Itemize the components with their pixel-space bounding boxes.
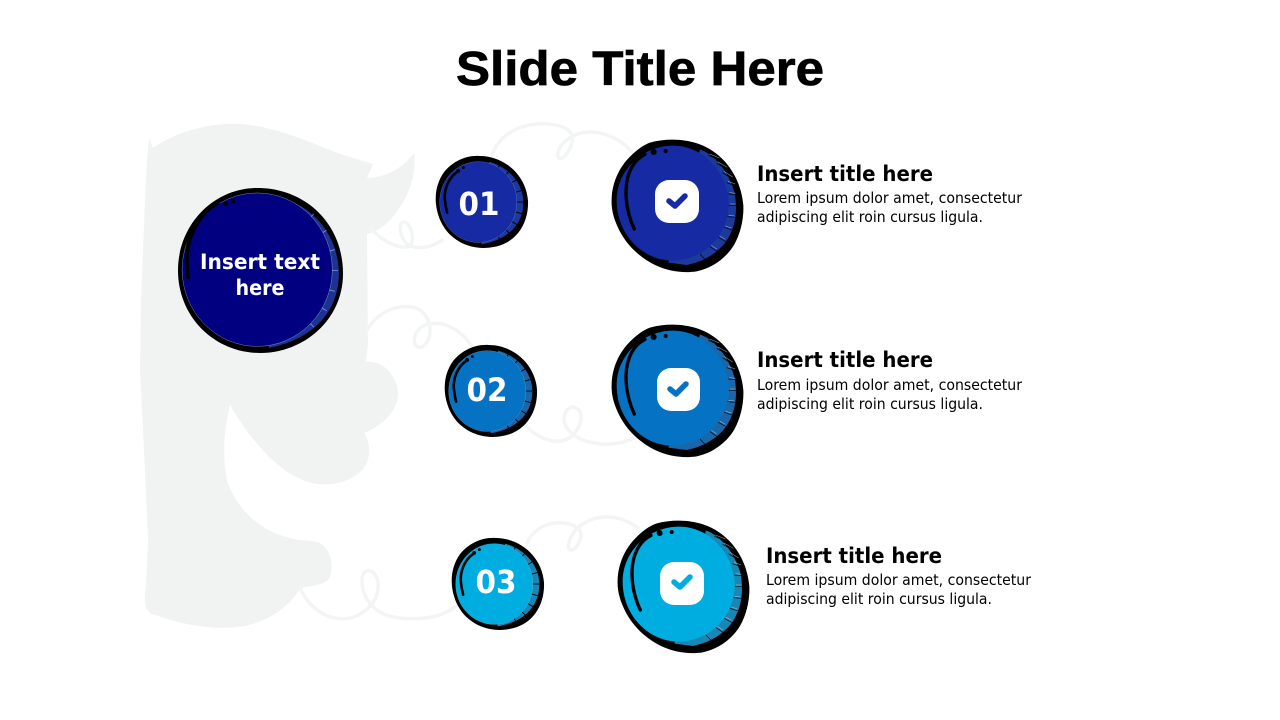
number coin 02	[445, 345, 537, 437]
connector squiggles	[300, 124, 640, 619]
number coin 01	[436, 156, 528, 248]
number coin 03	[452, 538, 544, 630]
text block 2: adipiscing elit roin cursus ligula.	[757, 395, 983, 413]
text block 1: adipiscing elit roin cursus ligula.	[757, 208, 983, 226]
text block 3	[766, 544, 1032, 608]
number coin 03: 03	[476, 563, 516, 601]
main circle: here	[236, 276, 284, 300]
icon: check badge 1	[655, 180, 699, 223]
text block 2	[757, 348, 1023, 413]
text block 3: Insert title here	[766, 544, 942, 568]
check coin 3	[618, 521, 749, 653]
text block 1: Lorem ipsum dolor amet, consectetur	[757, 189, 1023, 207]
check coin 1	[612, 140, 743, 272]
text block 3: adipiscing elit roin cursus ligula.	[766, 590, 992, 608]
text block 1	[757, 162, 1023, 226]
title: Slide Title Here	[456, 43, 824, 96]
background silhouette	[140, 124, 415, 628]
main circle text: Insert text	[200, 250, 320, 274]
text block 1: Insert title here	[757, 162, 933, 186]
number coin 02: 02	[466, 371, 508, 409]
text block 2: Lorem ipsum dolor amet, consectetur	[757, 376, 1023, 394]
number coin 01: 01	[458, 185, 500, 223]
check coin 2	[612, 325, 743, 457]
main circle	[178, 188, 343, 353]
icon: check badge 2	[657, 368, 700, 411]
icon: check badge 3	[660, 562, 704, 605]
text block 2: Insert title here	[757, 348, 933, 372]
text block 3: Lorem ipsum dolor amet, consectetur	[766, 571, 1032, 589]
